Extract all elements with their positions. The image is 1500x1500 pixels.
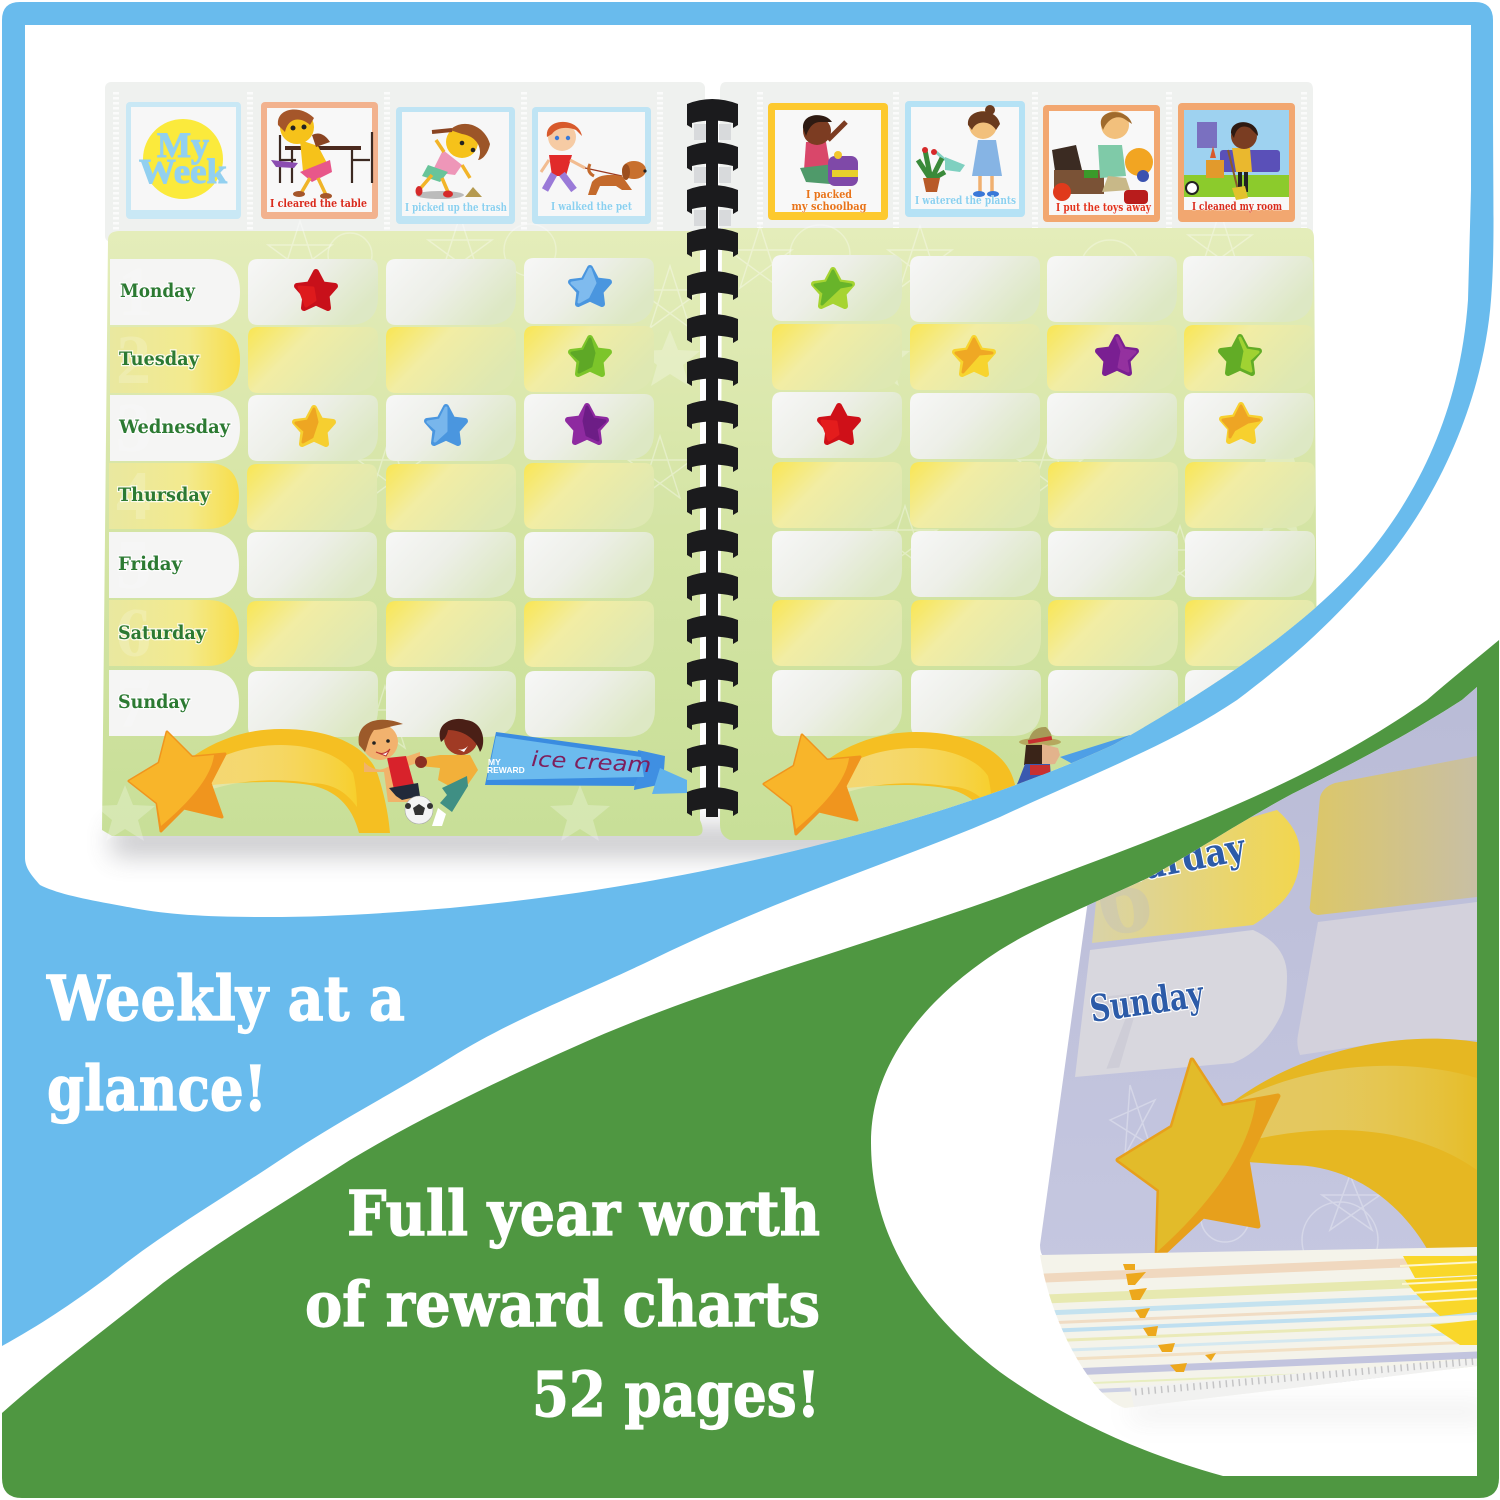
my reward ribbon [485,732,687,794]
saturday cell [1310,756,1477,915]
card: cleared the table: I cleared the table [270,196,367,210]
sunday tab [1075,930,1287,1077]
card: my week: My [157,125,209,165]
card: packed my schoolbag: my schoolbag [792,199,866,213]
day labels column: Wednesday [118,416,231,438]
white top panel with open chart book [25,25,1471,917]
day labels column: Tuesday [119,348,200,370]
card: packed my schoolbag: I packed [806,187,852,201]
card: picked up the trash: I picked up the trash [405,200,507,214]
headline: weekly at a glance: glance! [47,1052,267,1125]
day labels column: Friday [118,553,183,575]
headline: weekly at a glance: Weekly at a [46,962,405,1035]
day labels column: 1 [118,254,153,331]
day labels column: Thursday [118,484,211,506]
left chart grid [247,258,655,737]
right shooting star [764,732,1025,836]
hiker figure [1016,727,1130,784]
card: put the toys away: I put the toys away [1056,200,1151,214]
card: cleaned my room: I cleaned my room [1192,199,1282,213]
left doodles [95,216,702,841]
day labels column: 6 [116,595,151,672]
day labels column: 3 [116,390,151,467]
page stack edge [1018,1240,1500,1420]
day labels column: 2 [116,322,151,399]
left pocket strip [105,82,705,242]
headline: weekly at a glance [46,962,405,1125]
day labels column: 7 [116,665,151,742]
left shooting star [129,729,390,833]
card: cleared the table [261,102,378,219]
day labels column: Saturday [118,622,207,644]
lavender page [1040,650,1477,1262]
right green sheet [720,228,1318,840]
faint numerals: 7 [1085,967,1152,1094]
day labels column: Monday [120,280,196,302]
card: walked the pet [532,107,651,224]
my reward ribbon: REWARD [487,765,525,775]
left page [95,82,705,841]
day label: Saturday: Saturday [1078,824,1249,900]
day label: Sunday: Sunday [1087,971,1207,1031]
my reward ribbon: MY [488,757,501,767]
headline: full year worth of reward charts 52 pages [305,1177,820,1431]
card: put the toys away [1043,105,1160,222]
right chart grid [772,255,1315,736]
card: watered the plants [905,101,1025,217]
faint numerals [1096,888,1150,1068]
day labels column: 5 [116,527,151,604]
card: my week [126,102,241,219]
card: cleaned my room [1178,103,1295,222]
card: picked up the trash [396,107,515,224]
day labels column [109,254,240,742]
headline: full year worth of reward charts 52 pages: 52 pages! [532,1358,820,1431]
day labels column: Sunday [118,691,191,713]
page doodles [1108,1085,1380,1250]
headline: full year worth of reward charts 52 pages: Full year worth [347,1177,820,1250]
saturday tab [1092,810,1300,943]
right pocket strip [720,82,1313,240]
faint numerals: 6 [1090,832,1157,959]
book shadow [112,826,1212,856]
white window with close-up of chart stack [871,687,1477,1476]
green panel [2,640,1499,1498]
sunday cell [1297,902,1477,1055]
stack shadow [1155,1409,1465,1415]
right page [720,82,1318,840]
right doodles [728,211,1310,588]
card: watered the plants: I watered the plants [915,193,1016,207]
card: packed my schoolbag [768,103,888,220]
left stickers [295,268,609,444]
card: my week: Week [139,152,228,191]
right stickers [814,270,1260,442]
two kids with football [359,719,483,826]
card: walked the pet: I walked the pet [551,199,633,213]
day labels column: 4 [116,458,151,535]
my reward ribbon: ice cream [531,747,652,777]
spiral strip edge [1130,1359,1477,1407]
activity cards right page [768,101,1295,222]
spiral binding [687,99,738,817]
headline: full year worth of reward charts 52 pages: of reward charts [305,1268,820,1341]
big gold star [1118,1060,1278,1259]
left green sheet [102,231,703,836]
star tail [1230,1039,1477,1254]
activity cards left page [126,102,651,224]
